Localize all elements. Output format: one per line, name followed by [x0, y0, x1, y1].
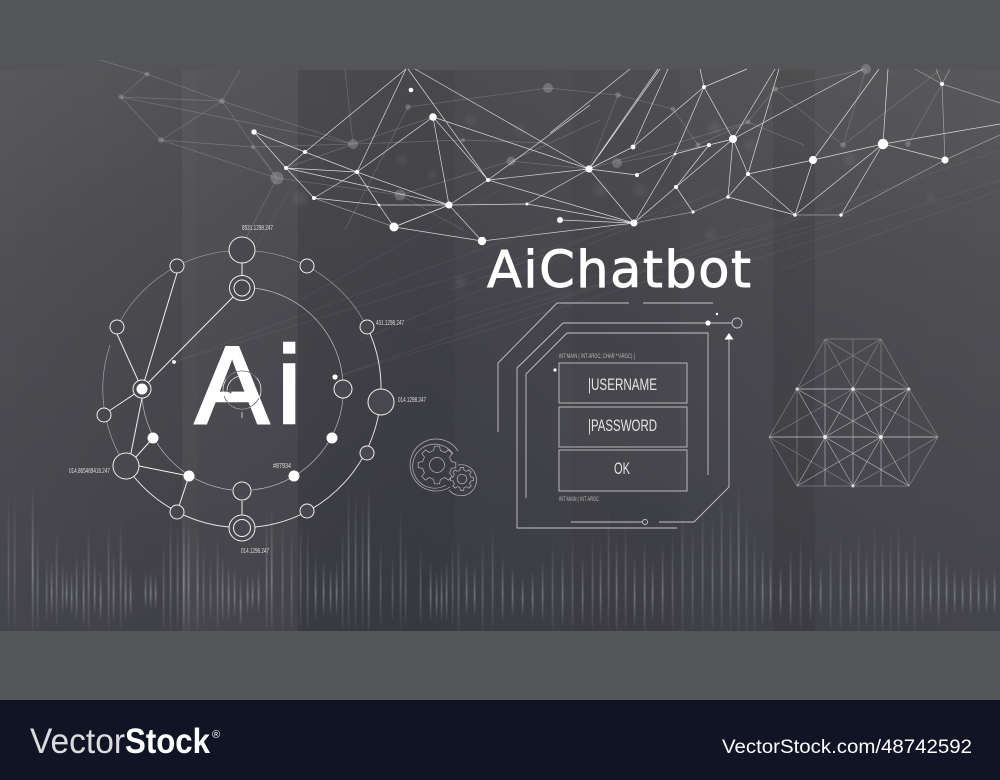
code caption bottom: INT MAIN ( INT ARGC	[559, 497, 599, 503]
footer logo: Stock	[125, 722, 210, 761]
ip label right upper: 431.1298.247	[376, 320, 404, 327]
footer image id: VectorStock.com/48742592	[722, 737, 972, 758]
big ai label: A	[195, 324, 270, 447]
ai circular node diagram	[69, 225, 426, 555]
ok button: OK	[614, 460, 630, 478]
username field	[559, 363, 687, 403]
network: bright polygon mesh	[251, 69, 1000, 245]
footer logo: Vector	[30, 722, 125, 761]
soft glow dots	[293, 115, 934, 287]
ip label right: 014.1298.247	[398, 397, 426, 404]
top grey stripe	[0, 0, 1000, 70]
ip label left: 014.865489416.247	[69, 468, 110, 475]
target ring over letter	[224, 371, 259, 409]
code caption top: INT MAIN ( INT ARGC, CHAR **ARGC) {	[559, 354, 635, 360]
ip label top: 8531.1298.247	[242, 225, 273, 232]
ip label bottom: 014.1298.247	[241, 548, 269, 555]
big ai label: i	[277, 324, 301, 447]
faint background rays	[174, 150, 1000, 377]
geometric hexagon mesh	[769, 339, 938, 487]
password field: |PASSWORD	[588, 417, 657, 435]
footer logo: ®	[212, 729, 220, 741]
big ai label	[195, 324, 301, 447]
outer and inner rings	[103, 251, 381, 527]
footer logo	[30, 722, 220, 761]
main dark panel	[0, 70, 1000, 631]
lower grey stripe	[0, 630, 1000, 700]
sound wave bars	[8, 480, 995, 630]
login panel circuit frame	[498, 303, 742, 528]
ok button	[559, 450, 687, 491]
username field: |USERNAME	[588, 376, 657, 394]
login form	[559, 354, 687, 503]
password field	[559, 407, 687, 447]
hex code label: #87934	[273, 463, 291, 470]
title: AiChatbot	[487, 241, 751, 300]
solid dots	[136, 360, 338, 482]
icon: gears	[410, 439, 477, 496]
network: faded back layer	[100, 60, 942, 250]
circle nodes	[97, 237, 394, 541]
centre target ring	[223, 371, 261, 418]
connecting links	[109, 263, 242, 516]
footer bar	[0, 700, 1000, 780]
